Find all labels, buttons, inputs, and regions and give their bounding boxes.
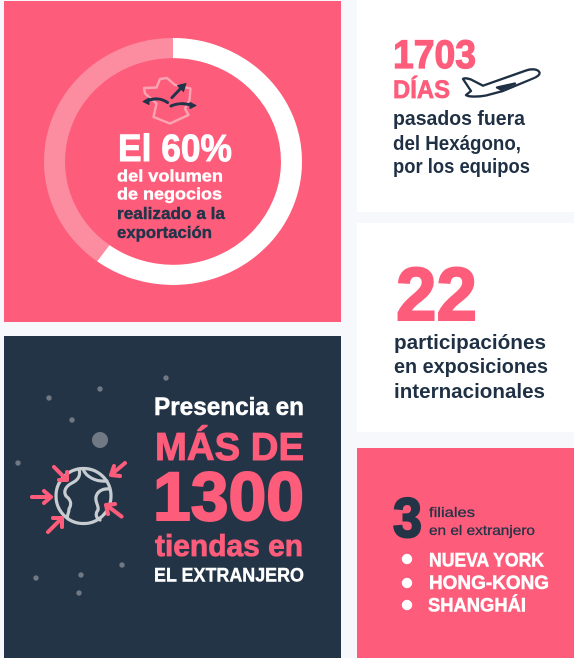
panel: exhibitions bbox=[357, 223, 574, 432]
heading: MÁS DE: MÁS DE bbox=[155, 425, 304, 469]
icon: France map with arrows bbox=[143, 78, 196, 124]
panel: export share bbox=[4, 1, 341, 322]
text: participaciónes en exposiciones internacionales: participaciónes bbox=[394, 332, 546, 354]
list: cities: NUEVA YORK bbox=[429, 550, 544, 572]
text: DÍAS: DÍAS bbox=[393, 75, 450, 104]
text: del volumen de negocios realizado a la exportación: de negocios bbox=[117, 184, 222, 204]
text: del volumen de negocios realizado a la exportación: del volumen bbox=[117, 166, 223, 186]
icon: globe with inward arrows bbox=[32, 463, 125, 532]
panel: stores abroad bbox=[4, 336, 341, 658]
text: pasados fuera del Hexágono, por los equipos: por los equipos bbox=[393, 156, 530, 178]
donut chart: 60% bbox=[54, 48, 292, 275]
number: 22: 22 bbox=[396, 252, 477, 336]
panel: days abroad bbox=[357, 0, 574, 212]
text: del volumen de negocios realizado a la exportación bbox=[117, 166, 226, 242]
text: filiales en el extranjero: en el extranjero bbox=[429, 522, 535, 538]
text: pasados fuera del Hexágono, por los equipos bbox=[393, 108, 530, 178]
text: pasados fuera del Hexágono, por los equipos: del Hexágono, bbox=[393, 133, 521, 155]
list: cities: HONG-KONG bbox=[429, 573, 549, 594]
panel: subsidiaries bbox=[357, 448, 574, 658]
heading: Presencia en: Presencia en bbox=[154, 393, 304, 421]
text: participaciónes en exposiciones internacionales bbox=[394, 332, 548, 403]
text: participaciónes en exposiciones internacionales: internacionales bbox=[394, 381, 545, 403]
decorative dots bbox=[15, 375, 169, 596]
text: filiales en el extranjero: filiales bbox=[429, 504, 475, 520]
text: del volumen de negocios realizado a la exportación: realizado a la bbox=[117, 204, 226, 223]
text: participaciónes en exposiciones internacionales: en exposiciones bbox=[394, 356, 548, 378]
heading: El 60%: El 60% bbox=[118, 128, 232, 170]
heading: tiendas en: tiendas en bbox=[155, 528, 303, 563]
list: cities: SHANGHÁI bbox=[428, 594, 526, 616]
text: EL EXTRANJERO: EL EXTRANJERO bbox=[154, 566, 304, 586]
list: cities bbox=[402, 550, 549, 616]
number: 1300: 1300 bbox=[153, 458, 304, 535]
number: 3: 3 bbox=[393, 486, 422, 549]
icon: airplane bbox=[463, 69, 540, 97]
text: pasados fuera del Hexágono, por los equipos: pasados fuera bbox=[393, 108, 526, 130]
text: filiales en el extranjero bbox=[429, 504, 535, 538]
text: del volumen de negocios realizado a la exportación: exportación bbox=[117, 223, 212, 242]
number: 1703: 1703 bbox=[393, 33, 476, 77]
